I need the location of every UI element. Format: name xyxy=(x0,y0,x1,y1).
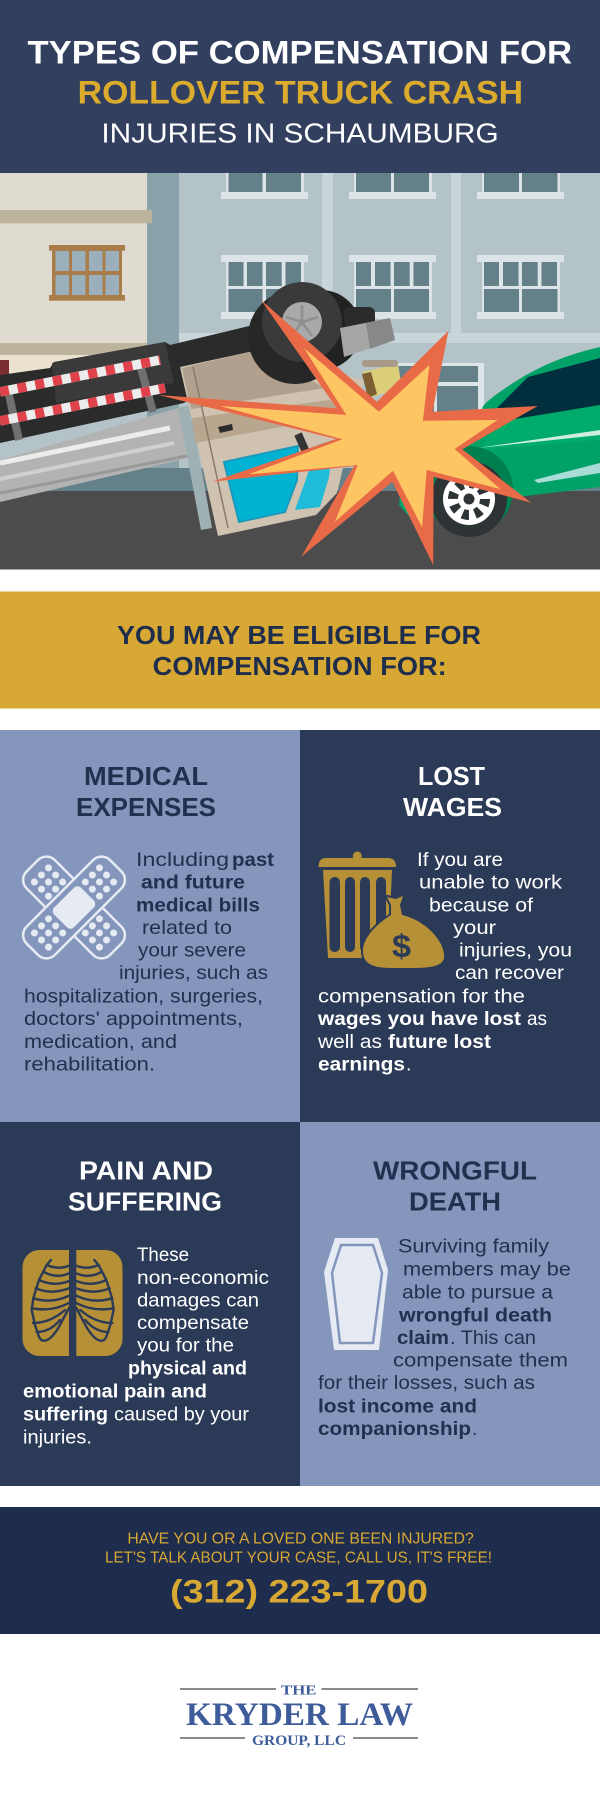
body text: medical expenses: injuries, such as xyxy=(119,962,268,984)
body text: wrongful death: able to pursue a xyxy=(402,1282,553,1304)
body text: pain and suffering: These xyxy=(137,1244,189,1266)
body text: medical expenses xyxy=(24,849,275,1076)
engine parts xyxy=(340,307,402,398)
call to action band: LET'S TALK ABOUT YOUR CASE, CALL US, IT'S FREE! xyxy=(105,1549,492,1566)
body text: medical expenses: hospitalization, surgeries, xyxy=(24,986,263,1008)
title line: types of compensation: TYPES OF COMPENSATION FOR xyxy=(28,34,572,70)
body text: medical expenses: and future xyxy=(141,872,245,894)
title line: rollover truck crash: ROLLOVER TRUCK CRASH xyxy=(78,74,523,110)
truck chassis xyxy=(0,323,268,443)
car wheel xyxy=(431,461,507,537)
panel: wrongful death xyxy=(300,1122,600,1486)
heading: medical expenses xyxy=(76,761,216,822)
body text: lost wages: because of xyxy=(429,895,534,917)
heading: lost wages xyxy=(403,761,502,822)
eligibility banner: YOU MAY BE ELIGIBLE FOR xyxy=(117,620,481,650)
silver truck bed xyxy=(0,405,212,530)
explosion burst xyxy=(159,300,538,565)
call to action band: HAVE YOU OR A LOVED ONE BEEN INJURED? xyxy=(127,1530,474,1547)
heading: pain and suffering: SUFFERING xyxy=(68,1187,222,1217)
body text: medical expenses: medical bills xyxy=(136,895,260,917)
body text: lost wages: well as xyxy=(317,1031,382,1053)
heading: wrongful death: DEATH xyxy=(409,1187,501,1217)
body text: medical expenses: rehabilitation. xyxy=(24,1054,155,1076)
illustration: rollover truck crash scene xyxy=(0,173,600,570)
heading: pain and suffering xyxy=(68,1155,222,1217)
heading: wrongful death xyxy=(373,1155,537,1217)
icon: trash can and money bag xyxy=(318,852,444,968)
body text: lost wages: wages you have lost xyxy=(317,1008,522,1030)
body text: lost wages: can recover xyxy=(455,962,565,984)
blue building backdrop xyxy=(0,173,600,569)
green car xyxy=(399,347,600,537)
body text: medical expenses: medication, and xyxy=(24,1031,177,1053)
body text: wrongful death: claim xyxy=(397,1327,449,1349)
body text: medical expenses: related to xyxy=(142,917,232,939)
body text: wrongful death: Surviving family xyxy=(398,1236,549,1258)
logo: the kryder law group xyxy=(180,1683,418,1749)
body text: wrongful death xyxy=(318,1236,571,1440)
body text: wrongful death: for their losses, such as xyxy=(318,1372,535,1394)
icon: trash can and money bag: $ xyxy=(392,928,411,964)
phone number: (312) 223-1700 xyxy=(170,1574,428,1610)
body text: pain and suffering: injuries. xyxy=(23,1426,92,1448)
icon: rib cage xyxy=(22,1250,122,1356)
heading: lost wages: LOST xyxy=(418,761,485,791)
body text: pain and suffering: physical and xyxy=(128,1357,247,1379)
road xyxy=(0,468,600,570)
body text: wrongful death: companionship xyxy=(318,1418,471,1440)
heading: medical expenses: MEDICAL xyxy=(84,761,208,791)
body text: wrongful death: members may be xyxy=(403,1259,571,1281)
body text: wrongful death: compensate them xyxy=(393,1350,568,1372)
body text: pain and suffering: emotional pain and xyxy=(23,1380,207,1402)
logo: the kryder law group: THE xyxy=(281,1683,316,1698)
body text: pain and suffering: non-economic xyxy=(137,1267,269,1289)
panel: medical expenses xyxy=(0,730,300,1122)
body text: pain and suffering: damages can xyxy=(137,1290,259,1312)
panel: lost wages xyxy=(300,730,600,1122)
body text: lost wages: . xyxy=(406,1054,411,1076)
call to action band xyxy=(0,1507,600,1634)
hazard stripes xyxy=(0,360,165,421)
body text: pain and suffering: caused by your xyxy=(114,1404,250,1426)
body text: pain and suffering: compensate xyxy=(137,1312,249,1334)
beige building with wooden window xyxy=(0,173,179,473)
body text: lost wages: unable to work xyxy=(419,872,562,894)
heading: pain and suffering: PAIN AND xyxy=(79,1155,213,1185)
body text: pain and suffering: you for the xyxy=(137,1335,234,1357)
body text: pain and suffering: suffering xyxy=(23,1404,108,1426)
body text: wrongful death: wrongful death xyxy=(398,1305,552,1327)
body text: medical expenses: doctors' appointments, xyxy=(24,1008,243,1030)
eligibility banner xyxy=(0,592,600,708)
title line: injuries in schaumburg: INJURIES IN SCHAUMBURG xyxy=(101,117,499,148)
heading: lost wages: WAGES xyxy=(403,792,502,822)
heading: medical expenses: EXPENSES xyxy=(76,792,216,822)
icon: coffin xyxy=(324,1238,388,1350)
body text: medical expenses: past xyxy=(232,849,275,871)
icon: crossed bandages xyxy=(18,852,130,963)
logo: the kryder law group: KRYDER LAW xyxy=(186,1697,413,1733)
body text: lost wages: compensation for the xyxy=(318,986,525,1008)
body text: lost wages: If you are xyxy=(417,849,503,871)
truck cab xyxy=(180,352,364,536)
eligibility banner: COMPENSATION FOR: xyxy=(153,651,447,681)
body text: lost wages: future lost xyxy=(388,1031,492,1053)
body text: lost wages: earnings xyxy=(318,1054,405,1076)
body text: lost wages xyxy=(317,849,572,1076)
body text: medical expenses: Including xyxy=(136,849,229,871)
body text: medical expenses: your severe xyxy=(138,940,246,962)
header panel xyxy=(0,0,600,173)
truck wheel xyxy=(248,282,361,384)
body text: wrongful death: . xyxy=(472,1418,477,1440)
body text: lost wages: injuries, you xyxy=(459,940,572,962)
logo: the kryder law group: GROUP, LLC xyxy=(252,1733,346,1749)
body text: wrongful death: lost income and xyxy=(318,1395,477,1417)
body text: pain and suffering xyxy=(23,1244,269,1448)
panel: pain and suffering xyxy=(0,1122,300,1486)
overturned truck xyxy=(0,282,402,536)
heading: wrongful death: WRONGFUL xyxy=(373,1155,537,1185)
body text: lost wages: as xyxy=(527,1008,547,1030)
body text: wrongful death: . This can xyxy=(450,1327,536,1349)
body text: lost wages: your xyxy=(453,917,497,939)
